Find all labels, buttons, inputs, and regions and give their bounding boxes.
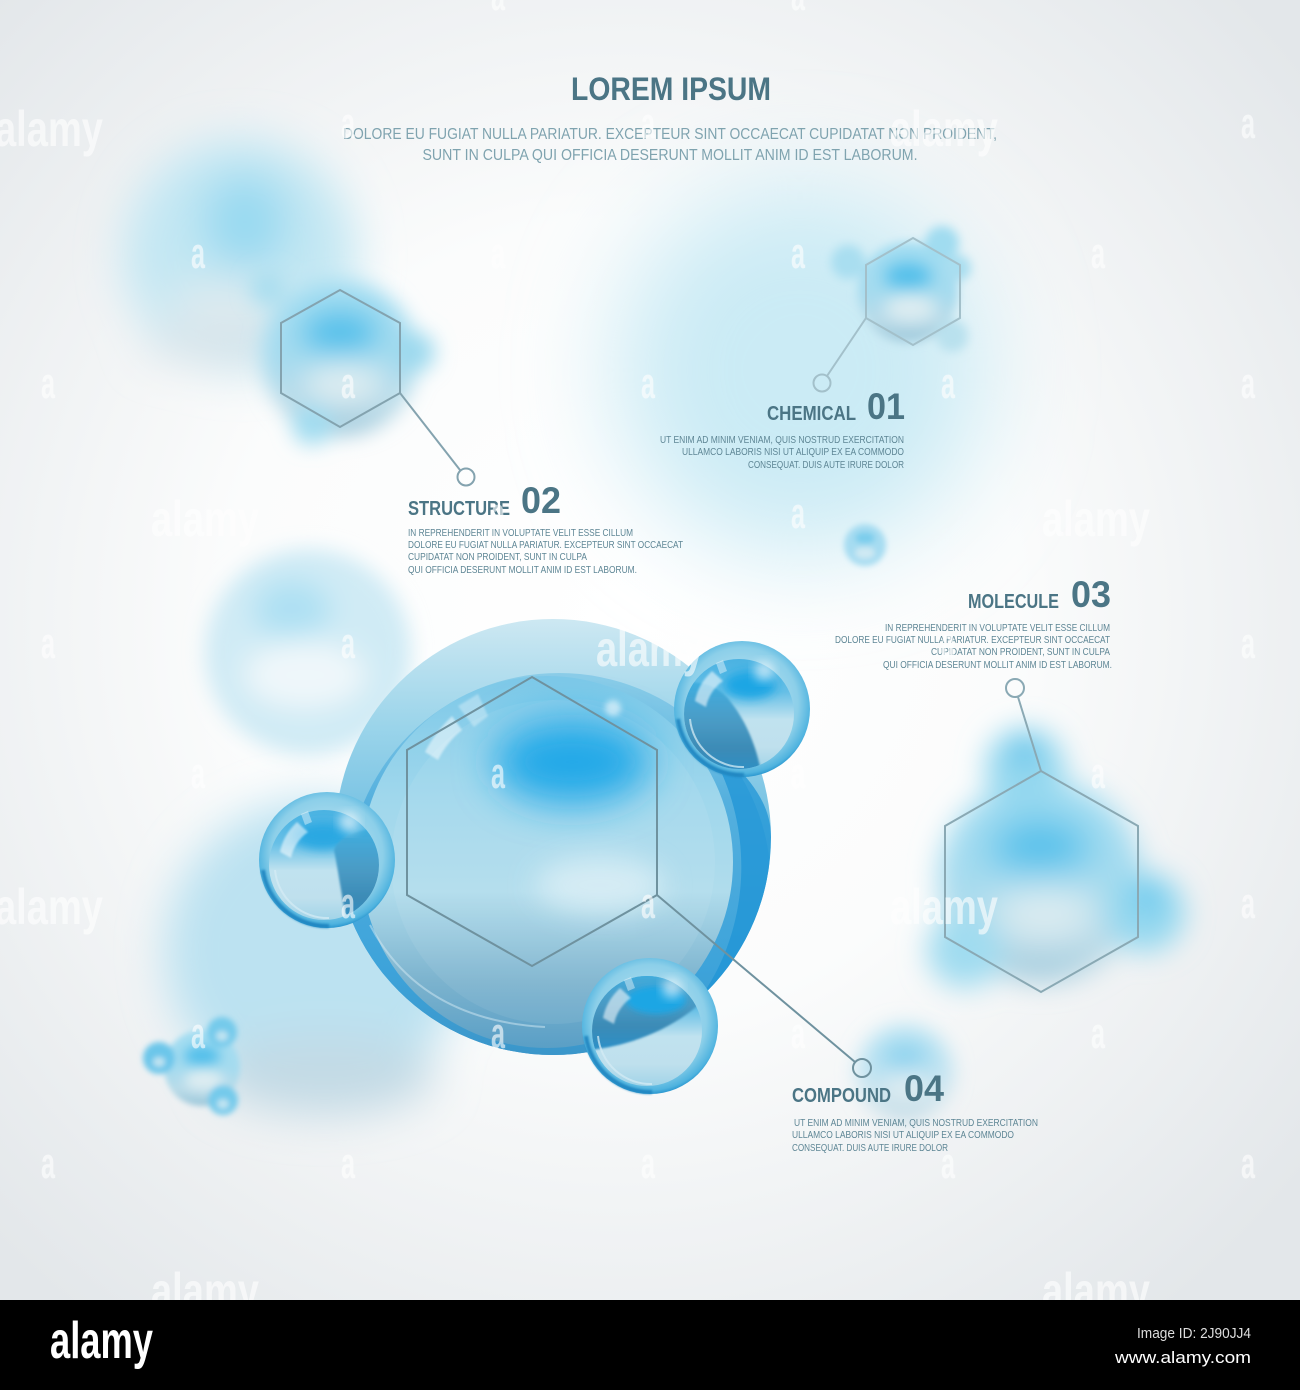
callout: compound 04: COMPOUND	[792, 1085, 891, 1107]
subtitle: SUNT IN CULPA QUI OFFICIA DESERUNT MOLLIT ANIM ID EST LABORUM.	[422, 147, 918, 164]
callout: chemical 01: UT ENIM AD MINIM VENIAM, QUIS NOSTRUD EXERCITATION	[660, 434, 904, 446]
watermarks: a	[791, 1009, 805, 1058]
small sphere: top right	[674, 641, 810, 777]
watermarks: a	[791, 229, 805, 278]
watermarks: a	[641, 1139, 655, 1188]
hexagon and connector: structure	[281, 290, 474, 486]
blurred sphere: large center right	[615, 185, 985, 555]
watermarks: a	[341, 1139, 355, 1188]
callout: structure 02: 02	[521, 480, 561, 521]
watermarks: alamy	[1042, 1263, 1150, 1319]
watermarks: a	[41, 1139, 55, 1188]
watermarks: a	[641, 879, 655, 928]
connector: compound	[657, 895, 871, 1077]
image id: Image ID: 2J90JJ4	[1137, 1325, 1251, 1342]
watermarks: a	[191, 229, 205, 278]
watermarks: alamy	[596, 621, 704, 677]
watermarks: a	[41, 359, 55, 408]
callout: molecule 03: MOLECULE	[968, 591, 1059, 613]
watermarks: a	[491, 229, 505, 278]
subtitle	[343, 126, 997, 164]
callout: structure 02: IN REPREHENDERIT IN VOLUPTATE VELIT ESSE CILLUM	[408, 527, 633, 539]
watermarks: a	[491, 749, 505, 798]
watermarks: a	[41, 619, 55, 668]
watermarks: a	[1241, 99, 1255, 148]
blurred sphere: lower left behind main	[165, 800, 465, 1115]
hexagon: main	[407, 677, 657, 966]
watermarks: a	[941, 359, 955, 408]
watermarks: alamy	[151, 491, 259, 547]
callout: compound 04	[792, 1068, 1038, 1154]
molecule: top left, blurred	[251, 271, 435, 445]
callout: molecule 03: CUPIDATAT NON PROIDENT, SUNT IN CULPA	[931, 646, 1110, 658]
small sphere: left	[259, 792, 395, 928]
hexagon and connector: chemical	[814, 238, 960, 392]
watermarks: a	[341, 99, 355, 148]
callout: structure 02: DOLORE EU FUGIAT NULLA PARIATUR. EXCEPTEUR SINT OCCAECAT	[408, 539, 683, 551]
callout: structure 02: CUPIDATAT NON PROIDENT, SUNT IN CULPA	[408, 551, 587, 563]
watermarks: a	[341, 879, 355, 928]
subtitle: DOLORE EU FUGIAT NULLA PARIATUR. EXCEPTEUR SINT OCCAECAT CUPIDATAT NON PROIDENT,	[343, 126, 997, 143]
main sphere	[335, 619, 771, 1097]
watermarks: a	[941, 619, 955, 668]
callout: compound 04: 04	[904, 1068, 944, 1109]
small sphere: bottom	[582, 958, 718, 1094]
watermarks: a	[641, 359, 655, 408]
watermarks: a	[1091, 229, 1105, 278]
watermarks: a	[191, 1009, 205, 1058]
watermarks: a	[1241, 619, 1255, 668]
watermarks: a	[1091, 1009, 1105, 1058]
blurred sphere: top left	[124, 139, 356, 371]
molecule: small bottom left, blurred	[143, 1017, 240, 1115]
watermarks: a	[341, 619, 355, 668]
callout: chemical 01: 01	[867, 386, 905, 427]
watermarks: a	[491, 489, 505, 538]
watermarks: alamy	[890, 101, 998, 157]
molecule: right, blurred	[927, 728, 1185, 988]
molecule: top right, blurred	[831, 226, 971, 352]
hexagon and connector: molecule	[945, 679, 1138, 992]
callout: molecule 03: IN REPREHENDERIT IN VOLUPTATE VELIT ESSE CILLUM	[885, 622, 1110, 634]
watermarks: a	[941, 1139, 955, 1188]
callout: chemical 01: CONSEQUAT. DUIS AUTE IRURE DOLOR	[748, 459, 904, 471]
callout: structure 02: QUI OFFICIA DESERUNT MOLLIT ANIM ID EST LABORUM.	[408, 564, 637, 576]
footer bar	[0, 1300, 1300, 1390]
watermarks: a	[1241, 879, 1255, 928]
watermarks: a	[341, 359, 355, 408]
callout: compound 04: CONSEQUAT. DUIS AUTE IRURE DOLOR	[792, 1142, 948, 1154]
watermarks: a	[191, 749, 205, 798]
watermarks: alamy	[151, 1263, 259, 1319]
small blurred sphere near chemical	[844, 524, 886, 566]
watermarks: a	[641, 99, 655, 148]
watermarks: a	[491, 1009, 505, 1058]
blurred sphere: lower right behind compound	[857, 1024, 953, 1120]
website: www.alamy.com	[1114, 1348, 1251, 1367]
callout: compound 04: ULLAMCO LABORIS NISI UT ALIQUIP EX EA COMMODO	[792, 1129, 1014, 1141]
callout: molecule 03	[835, 574, 1112, 671]
callout: molecule 03: DOLORE EU FUGIAT NULLA PARIATUR. EXCEPTEUR SINT OCCAECAT	[835, 634, 1110, 646]
callout: molecule 03: QUI OFFICIA DESERUNT MOLLIT ANIM ID EST LABORUM.	[883, 659, 1112, 671]
callout: structure 02: STRUCTURE	[408, 498, 510, 520]
blurred sphere: mid left	[205, 549, 411, 755]
callout: chemical 01: CHEMICAL	[767, 403, 856, 425]
callout: molecule 03: 03	[1071, 574, 1111, 615]
callout: chemical 01: ULLAMCO LABORIS NISI UT ALIQUIP EX EA COMMODO	[682, 446, 904, 458]
callout: structure 02	[408, 480, 683, 576]
watermarks: a	[1241, 359, 1255, 408]
callout: chemical 01	[660, 386, 905, 471]
watermarks: a	[1091, 749, 1105, 798]
watermarks: alamy	[890, 879, 998, 935]
watermarks: a	[791, 749, 805, 798]
watermarks: alamy	[1042, 491, 1150, 547]
watermarks: a	[791, 489, 805, 538]
title: LOREM IPSUM	[571, 71, 771, 107]
watermarks: a	[1241, 1139, 1255, 1188]
callout: compound 04: UT ENIM AD MINIM VENIAM, QUIS NOSTRUD EXERCITATION	[794, 1117, 1038, 1129]
footer logo: alamy	[50, 1312, 153, 1370]
